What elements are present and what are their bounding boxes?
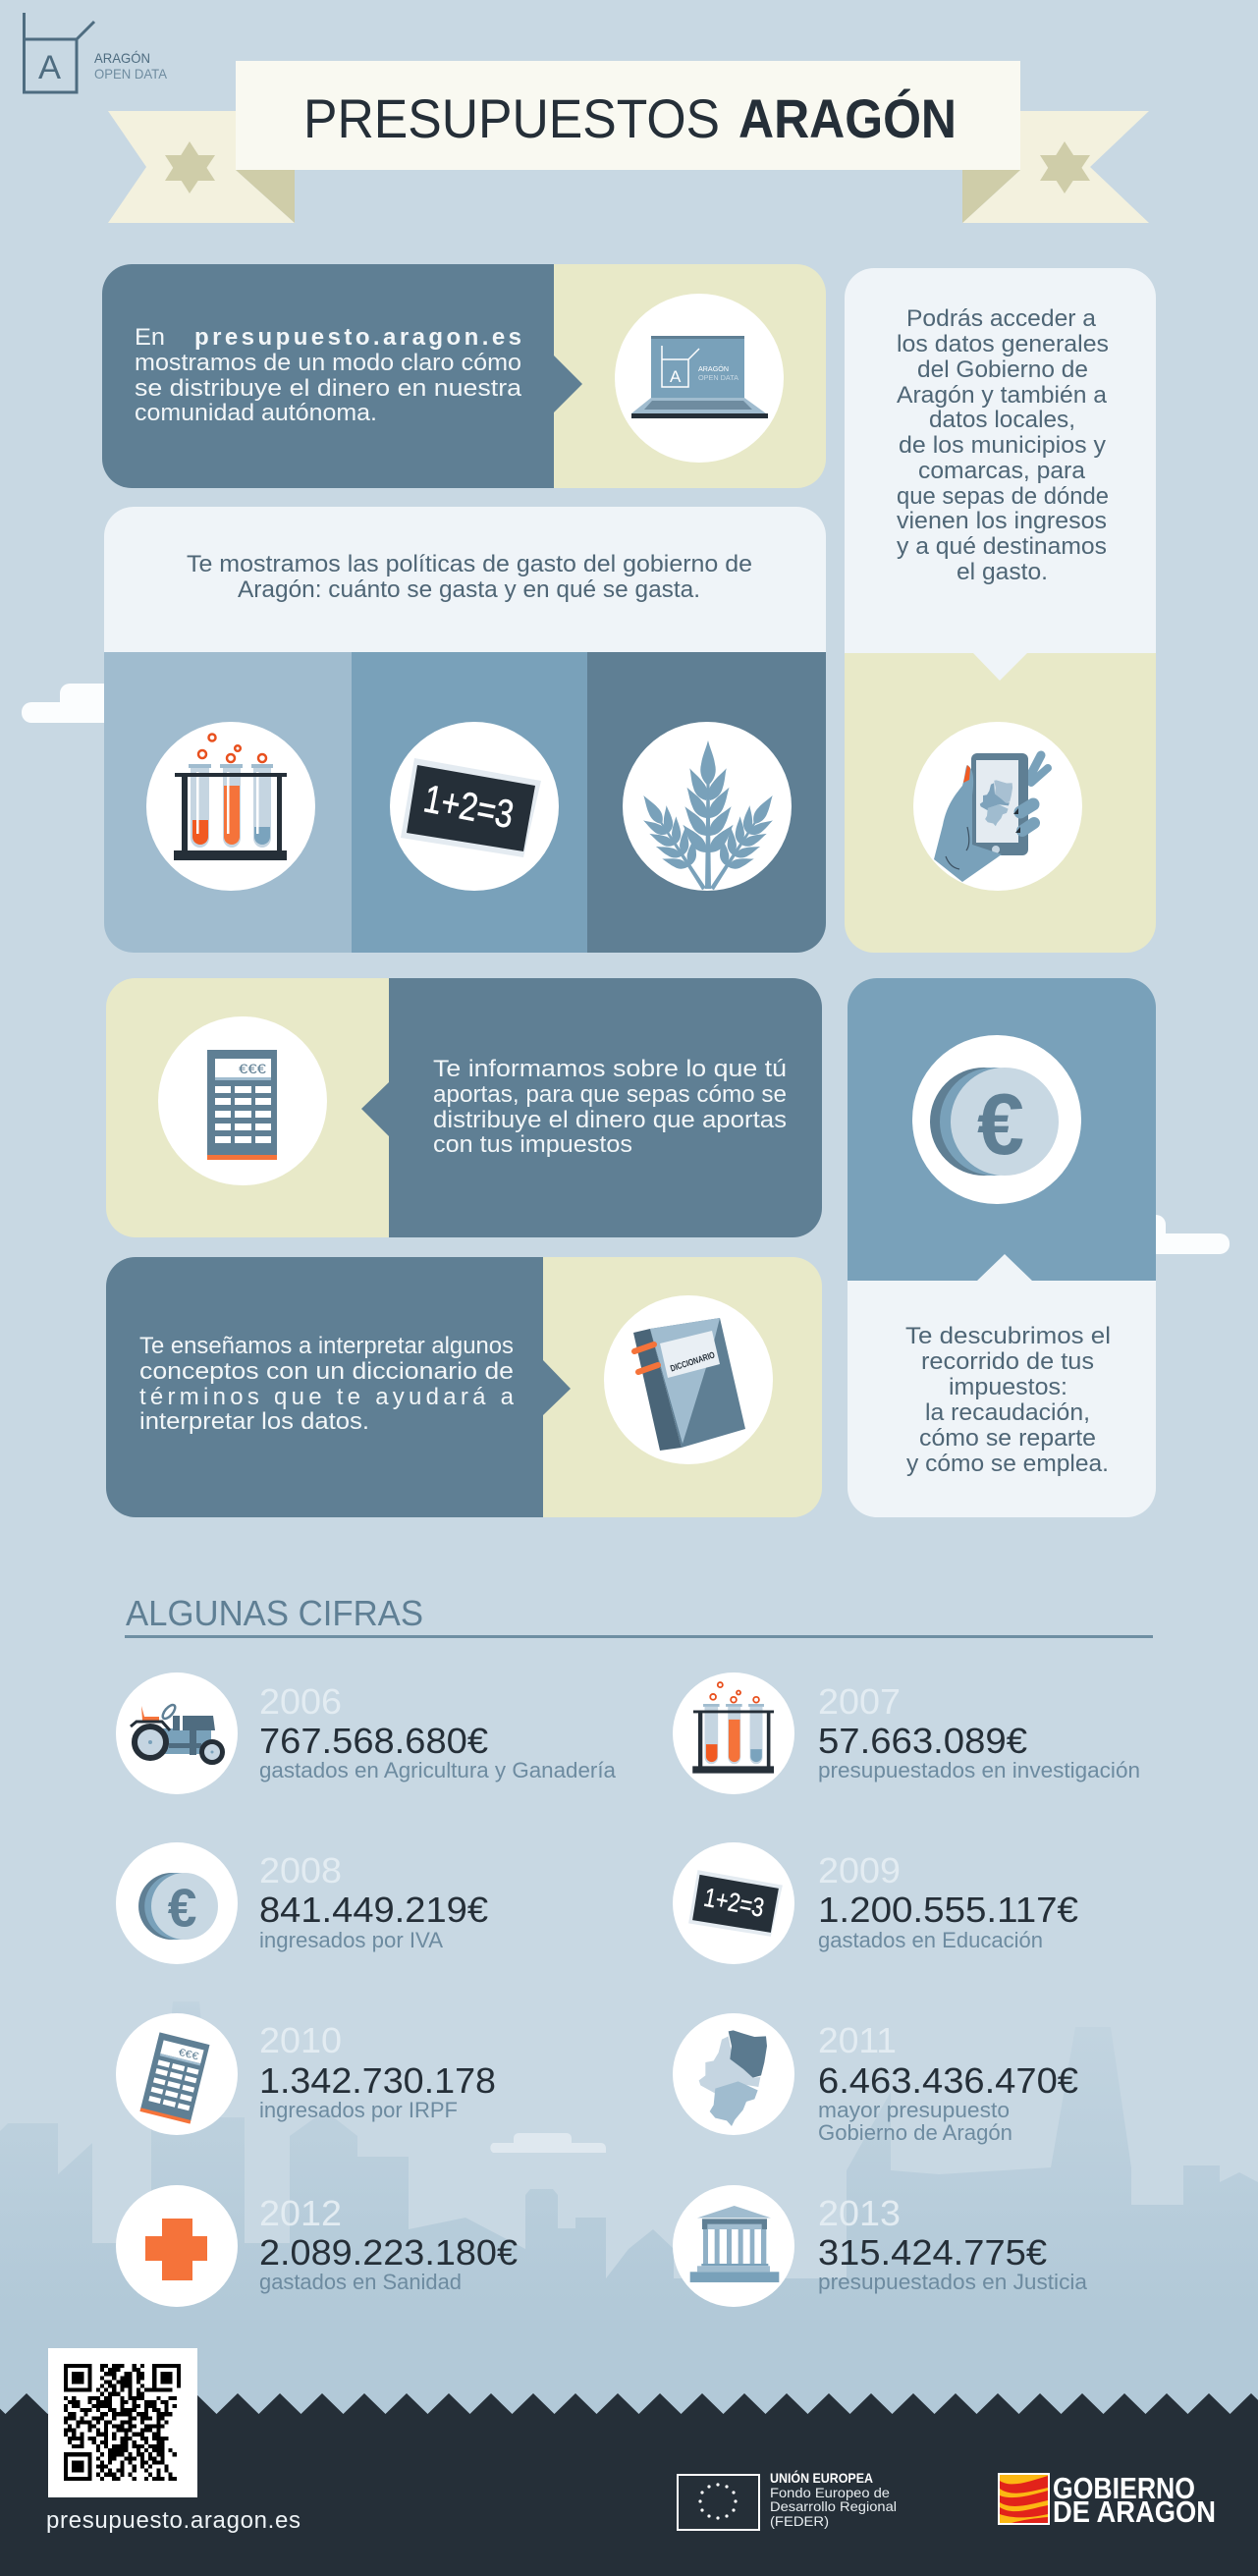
icon: calculator: €€€ <box>239 1061 266 1076</box>
heading: algunas cifras: ALGUNAS CIFRAS <box>126 1593 423 1633</box>
stat text: 767.568.680€ <box>259 1721 488 1761</box>
footer url: presupuesto.aragon.es <box>46 2507 301 2534</box>
gobierno text: GOBIERNO <box>1053 2471 1195 2505</box>
stat: 2013 justice <box>673 2185 1088 2307</box>
text: spending policies: Te mostramos las políticas de gasto del gobierno de <box>187 551 752 577</box>
icon: courthouse <box>673 2185 794 2307</box>
title text: PRESUPUESTOS <box>303 87 720 149</box>
stat text: 315.424.775€ <box>818 2232 1047 2273</box>
icon: test tubes small <box>673 1672 794 1794</box>
heading: algunas cifras <box>125 1593 1153 1638</box>
stat: 2009 education <box>673 1842 1078 1964</box>
icon: Aragón map <box>673 2013 794 2135</box>
text: intro: En <box>135 324 165 351</box>
icon: euro coin <box>912 1035 1081 1204</box>
text: intro: se distribuye el dinero en nuestra <box>135 375 522 402</box>
text: access to data: de los municipios y <box>899 432 1106 459</box>
icon: tractor <box>116 1672 238 1794</box>
QR code <box>48 2348 197 2497</box>
text: dictionary: términos que te ayudará a <box>139 1384 515 1410</box>
icon: coin small <box>116 1842 238 1964</box>
text: access to data: los datos generales <box>897 331 1109 357</box>
stat text <box>259 2193 518 2294</box>
stat text: 2010 <box>259 2020 342 2060</box>
panel: tax journey <box>848 978 1156 1517</box>
text: access to data: comarcas, para <box>918 458 1086 484</box>
text: access to data: vienen los ingresos <box>897 508 1107 534</box>
FEDER text: UNIÓN EUROPEA <box>770 2469 873 2486</box>
stat text <box>259 1850 488 1952</box>
icon: calculator small <box>116 2013 238 2135</box>
stat text <box>818 2193 1088 2294</box>
stat: 2010 income tax <box>116 2013 496 2135</box>
stat text <box>818 1850 1078 1952</box>
stat: 2012 health <box>116 2185 518 2307</box>
stat text <box>818 2020 1078 2145</box>
text: tax journey: Te descubrimos el <box>905 1323 1111 1349</box>
icon: blackboard small <box>673 1842 794 1964</box>
gobierno text: DE ARAGON <box>1053 2494 1216 2529</box>
stat text: mayor presupuesto <box>818 2098 1010 2122</box>
panel: your taxes contribution <box>106 978 822 1237</box>
stat: 2006 agriculture <box>116 1672 617 1794</box>
text: your taxes contribution: distribuye el dinero que aportas <box>433 1107 787 1133</box>
icon: coin small: € <box>168 1878 196 1938</box>
logo: Aragón Open Data: OPEN DATA <box>94 66 168 82</box>
FEDER text: Desarrollo Regional <box>770 2498 897 2514</box>
stat text <box>259 2020 496 2122</box>
icon: medical cross <box>116 2185 238 2307</box>
stat text: Gobierno de Aragón <box>818 2120 1012 2145</box>
text: access to data <box>897 305 1109 585</box>
panel: access to data <box>845 268 1156 953</box>
text: access to data: y a qué destinamos <box>897 533 1107 560</box>
text: dictionary: interpretar los datos. <box>139 1408 369 1435</box>
stat text: 2011 <box>818 2020 897 2060</box>
stat text: 57.663.089€ <box>818 1721 1027 1761</box>
stat: 2008 VAT <box>116 1842 488 1964</box>
icon: blackboard <box>390 722 559 891</box>
stat text: ingresados por IVA <box>259 1928 443 1952</box>
icon: laptop: ARAGÓN <box>698 364 729 373</box>
text: tax journey: y cómo se emplea. <box>906 1451 1109 1477</box>
text: tax journey: la recaudación, <box>925 1399 1090 1426</box>
panel: spending policies <box>104 507 826 953</box>
stat text: 2013 <box>818 2193 901 2233</box>
stat text: 2012 <box>259 2193 342 2233</box>
icon: dictionary book <box>604 1295 773 1464</box>
stat text: gastados en Educación <box>818 1928 1043 1952</box>
icon: calculator small: €€€ <box>177 2048 200 2062</box>
text: tax journey: impuestos: <box>949 1374 1067 1400</box>
stat: 2011 largest budget <box>673 2013 1078 2145</box>
icon: blackboard: 1+2=3 <box>420 777 518 837</box>
icon: laptop: A <box>670 367 682 386</box>
text: access to data: Aragón y también a <box>897 382 1108 409</box>
title text: ARAGÓN <box>738 87 957 149</box>
text: intro: presupuesto.aragon.es <box>194 324 521 351</box>
stat text: ingresados por IRPF <box>259 2098 458 2122</box>
text: spending policies: Aragón: cuánto se gasta y en qué se gasta. <box>238 576 700 603</box>
text: your taxes contribution <box>433 1056 787 1158</box>
stat text: presupuestados en Justicia <box>818 2270 1088 2294</box>
icon: laptop: OPEN DATA <box>698 375 738 382</box>
stat text: gastados en Agricultura y Ganadería <box>259 1758 617 1782</box>
text: intro: mostramos de un modo claro cómo <box>135 350 521 376</box>
stat: 2007 research <box>673 1672 1140 1794</box>
icon: test tubes <box>146 722 315 891</box>
logo: Gobierno de Aragón <box>998 2471 1216 2529</box>
stat text: 2009 <box>818 1850 901 1891</box>
icon: wheat <box>623 722 792 901</box>
panel: intro presupuesto.aragon.es <box>102 264 826 488</box>
logo: Aragón Open Data: ARAGÓN <box>94 50 150 66</box>
icon: hand holding phone <box>913 722 1082 891</box>
text: access to data: el gasto. <box>957 559 1048 585</box>
icon: euro coin: € <box>977 1075 1024 1173</box>
stat text <box>818 1681 1140 1782</box>
text: intro: comunidad autónoma. <box>135 400 377 426</box>
icon: laptop <box>615 294 784 463</box>
stat text: 841.449.219€ <box>259 1890 488 1930</box>
text: tax journey: recorrido de tus <box>921 1348 1094 1375</box>
text: your taxes contribution: aportas, para que sepas cómo se <box>433 1081 787 1108</box>
icon: blackboard small: 1+2=3 <box>701 1883 767 1923</box>
stat text: 2006 <box>259 1681 342 1722</box>
text: intro <box>135 324 522 426</box>
title banner <box>108 61 1149 223</box>
stat text: gastados en Sanidad <box>259 2270 462 2294</box>
panel: dictionary <box>106 1257 822 1517</box>
gobierno text <box>1053 2471 1216 2529</box>
city skyline background <box>0 2001 1258 2426</box>
icon: calculator <box>158 1016 327 1185</box>
decorative small cloud <box>490 2133 606 2153</box>
footer band <box>0 2393 1258 2576</box>
FEDER text: (FEDER) <box>770 2513 829 2529</box>
text: access to data: datos locales, <box>929 407 1075 433</box>
text: dictionary: conceptos con un diccionario de <box>139 1358 514 1385</box>
FEDER text <box>770 2469 897 2529</box>
text: dictionary <box>139 1333 515 1435</box>
stat text: 1.342.730.178 <box>259 2060 496 2101</box>
stat text: 2007 <box>818 1681 901 1722</box>
text: your taxes contribution: con tus impuestos <box>433 1131 632 1158</box>
text: tax journey <box>905 1323 1111 1477</box>
stat text: 2008 <box>259 1850 342 1891</box>
text: tax journey: cómo se reparte <box>919 1425 1096 1452</box>
stat text: 6.463.436.470€ <box>818 2060 1078 2101</box>
text: spending policies <box>187 551 752 603</box>
FEDER text: Fondo Europeo de <box>770 2485 890 2500</box>
text: access to data: Podrás acceder a <box>906 305 1097 332</box>
decorative clouds <box>22 684 1230 1254</box>
stat text <box>259 1681 617 1782</box>
logo: Aragón Open Data: A <box>38 49 61 86</box>
text: your taxes contribution: Te informamos sobre lo que tú <box>433 1056 787 1082</box>
icon: dictionary book: DICCIONARIO <box>669 1349 716 1373</box>
stat text: 1.200.555.117€ <box>818 1890 1078 1930</box>
text: dictionary: Te enseñamos a interpretar algunos <box>139 1333 514 1359</box>
logo: Aragón Open Data <box>24 13 168 92</box>
text: access to data: que sepas de dónde <box>897 483 1109 510</box>
title text <box>303 87 957 149</box>
stat text: 2.089.223.180€ <box>259 2232 518 2273</box>
logo: European Union FEDER <box>678 2469 897 2530</box>
stat text: presupuestados en investigación <box>818 1758 1140 1782</box>
text: access to data: del Gobierno de <box>917 356 1088 383</box>
